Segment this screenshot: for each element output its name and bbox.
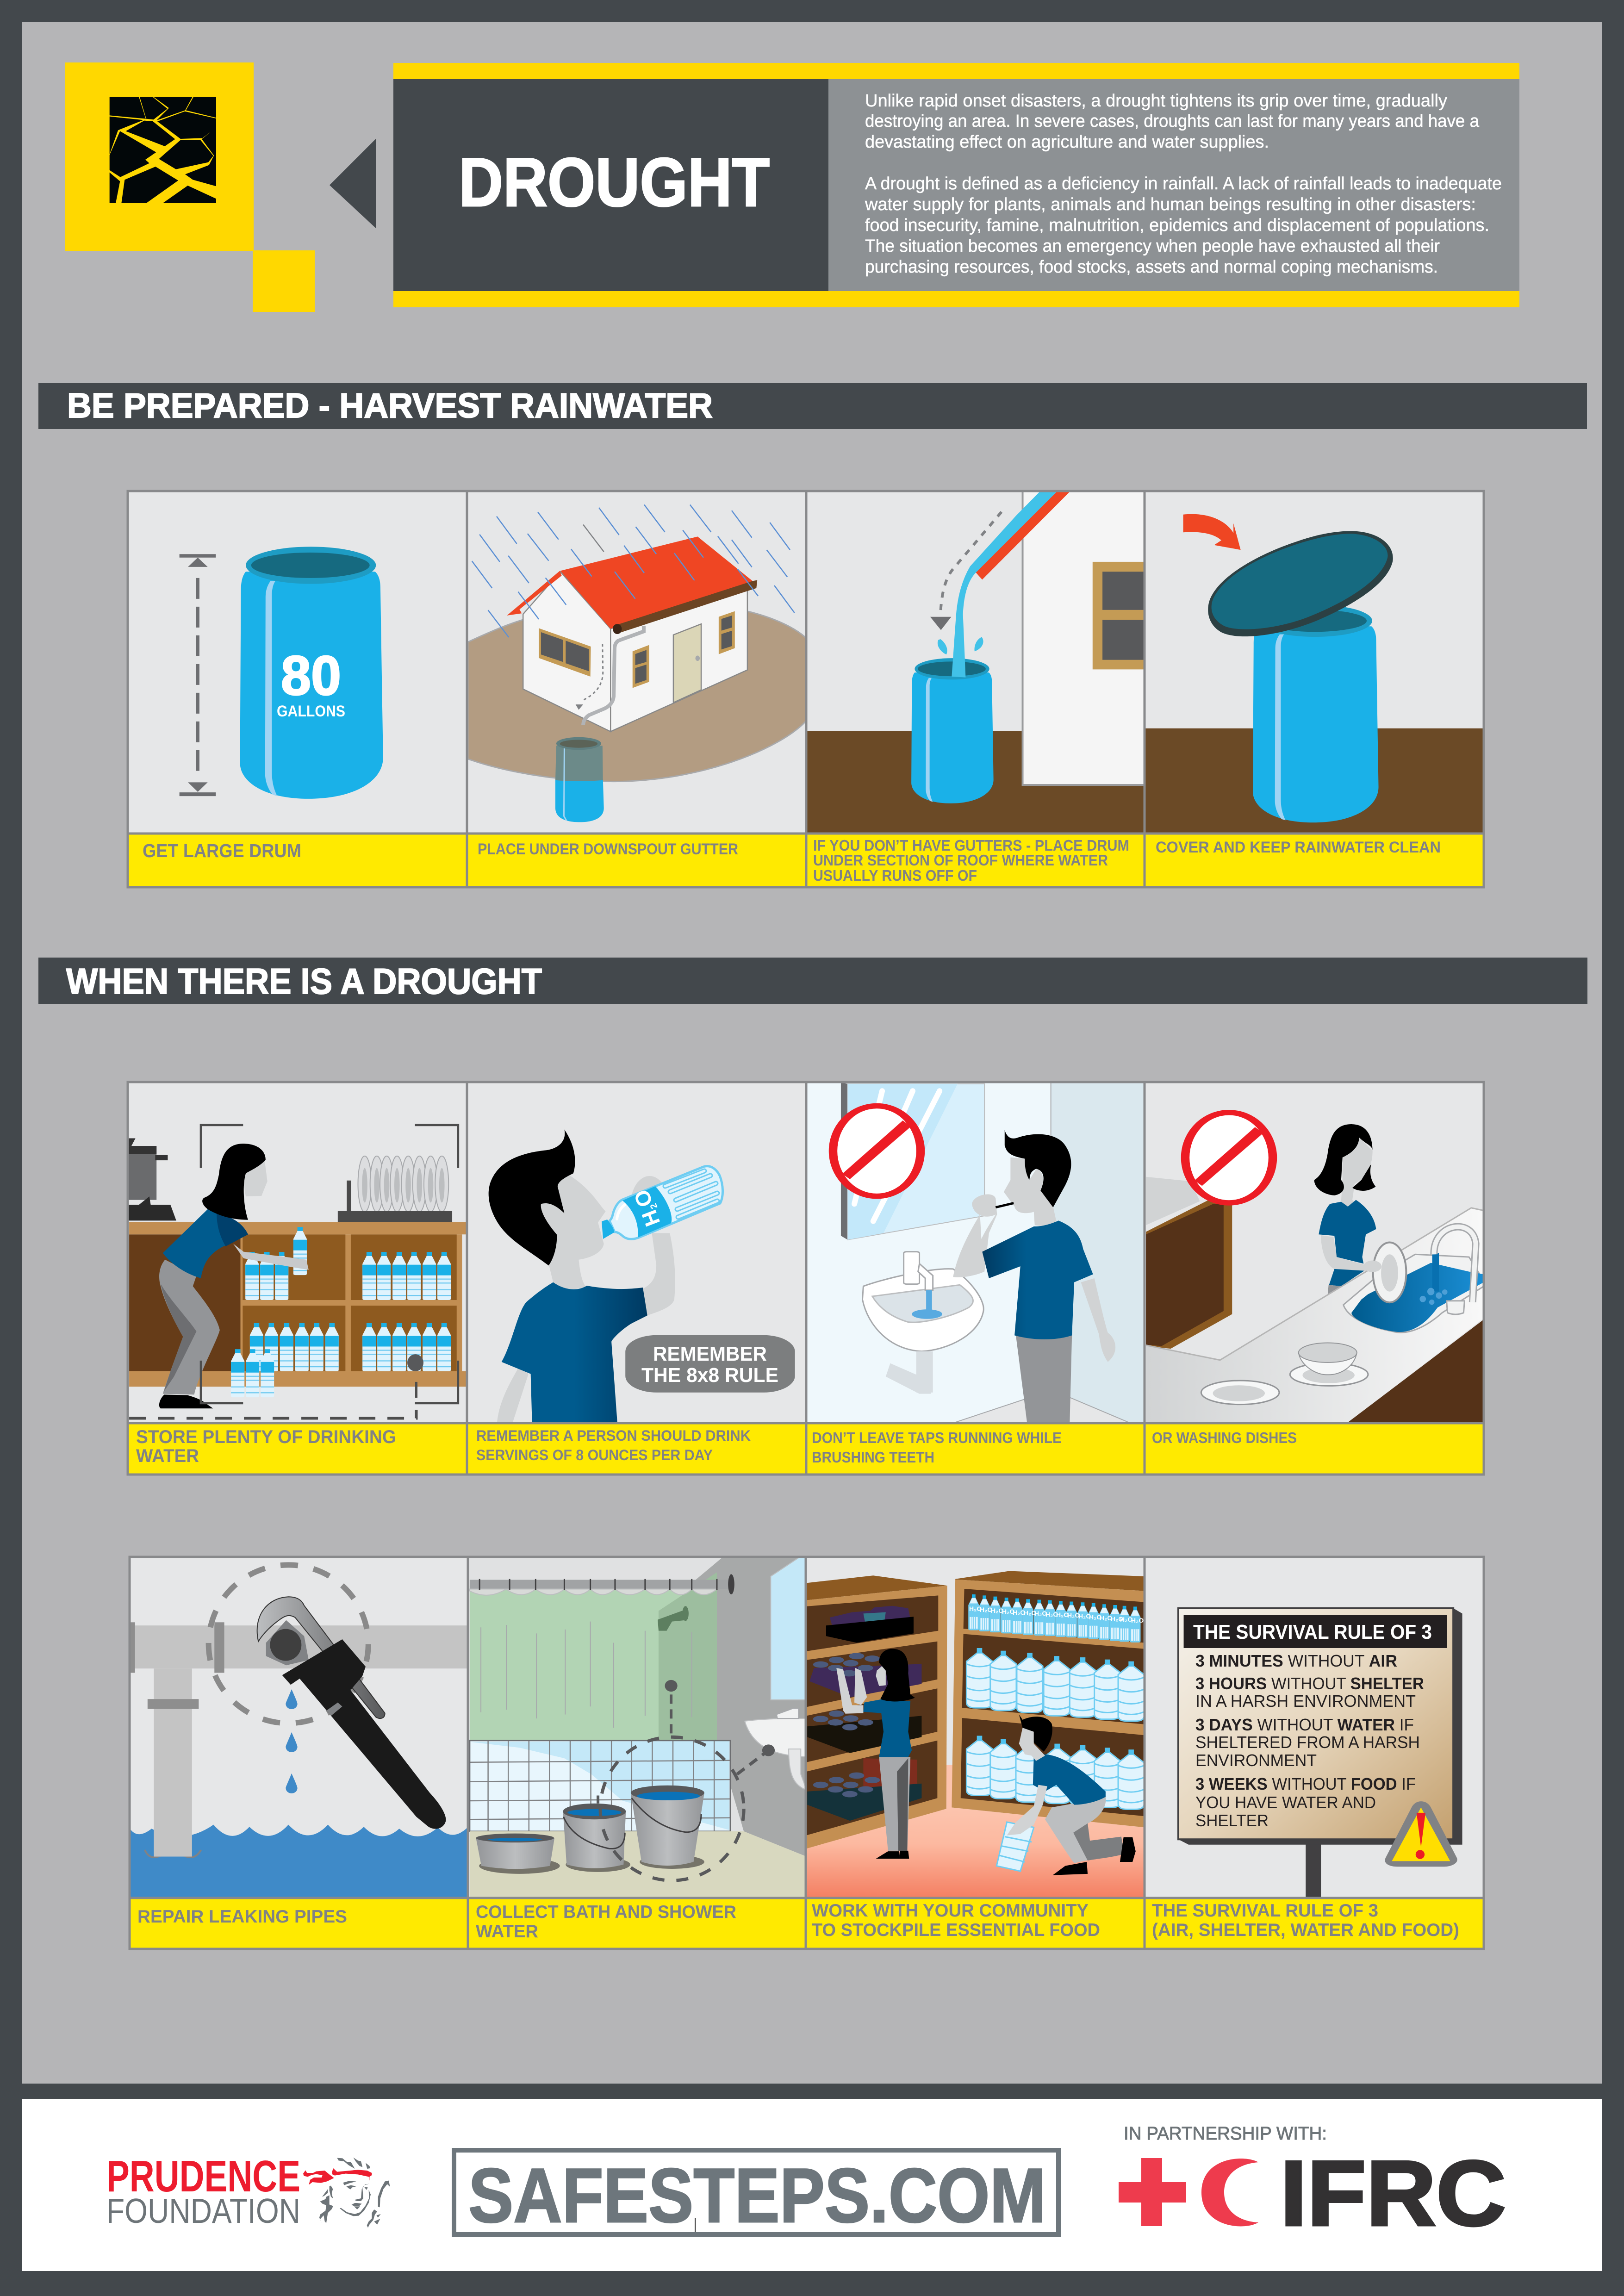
caption: REPAIR LEAKING PIPES [137, 1907, 347, 1927]
icon: H2O bottle: 2 [648, 1202, 660, 1210]
caption: (AIR, SHELTER, WATER AND FOOD) [1152, 1920, 1459, 1940]
logo: IFRC: IFRC [1280, 2142, 1506, 2245]
panel: community stockpile [806, 1557, 1145, 1949]
panel: store drinking water [128, 1082, 467, 1475]
sign text [1195, 1651, 1424, 1830]
sign text: YOU HAVE WATER AND [1195, 1793, 1376, 1812]
small bottle labels: H₂O [1034, 1610, 1047, 1617]
illustration: roof runoff into drum [806, 489, 1148, 834]
panel: collect bath water [468, 1557, 807, 1949]
caption: OR WASHING DISHES [1152, 1429, 1297, 1446]
panel: cover drum [1145, 491, 1484, 887]
panel: place under downspout [467, 491, 812, 887]
panel: do not leave taps running [806, 1082, 1145, 1475]
illustration: lid on drum [1145, 514, 1484, 834]
sign text: ENVIRONMENT [1195, 1751, 1317, 1770]
logo: IFRC [1119, 2142, 1506, 2245]
header panel [393, 63, 1519, 307]
caption: WATER [136, 1446, 199, 1466]
intro text [865, 91, 1502, 277]
small bottle labels: H₂O [1120, 1616, 1132, 1623]
sign text: IN A HARSH ENVIRONMENT [1195, 1692, 1416, 1711]
illustration: man drinking [489, 1130, 795, 1422]
partnership label: IN PARTNERSHIP WITH: [1124, 2123, 1327, 2144]
caption: REMEMBER A PERSON SHOULD DRINK [476, 1427, 751, 1444]
caption [806, 834, 1145, 887]
caption: USUALLY RUNS OFF OF [813, 867, 977, 884]
caption: PLACE UNDER DOWNSPOUT GUTTER [478, 840, 738, 858]
heading: be prepared: BE PREPARED - HARVEST RAINWATER [67, 386, 713, 425]
caption [128, 1423, 467, 1475]
small bottle labels: H₂O [980, 1606, 992, 1613]
small bottle labels: H₂O [1100, 1614, 1112, 1622]
small bottle labels: H₂O [991, 1607, 1003, 1614]
small bottle labels: H₂O [969, 1605, 982, 1612]
intro text: Unlike rapid onset disasters, a drought tightens its grip over time, gradually [865, 91, 1447, 111]
small bottle labels: H₂O [1067, 1612, 1080, 1619]
caption [806, 1898, 1145, 1949]
caption: SERVINGS OF 8 OUNCES PER DAY [476, 1447, 713, 1463]
small bottle labels: H₂O [1013, 1609, 1025, 1616]
icon: H2O bottle [602, 1166, 723, 1239]
caption [467, 834, 806, 887]
small bottle labels [969, 1605, 1144, 1624]
sign text: SHELTERED FROM A HARSH [1195, 1733, 1420, 1752]
caption: WATER [476, 1922, 538, 1941]
caption [1145, 1423, 1484, 1475]
intro text: purchasing resources, food stocks, assets and normal coping mechanisms. [865, 257, 1438, 277]
logo: prudence foundation [106, 2152, 390, 2230]
small bottle labels: H₂O [1131, 1617, 1144, 1624]
caption: TO STOCKPILE ESSENTIAL FOOD [812, 1920, 1100, 1940]
caption: WORK WITH YOUR COMMUNITY [812, 1901, 1089, 1921]
panel: repair leaking pipes [130, 1557, 468, 1949]
illustration: woman washing dishes [1146, 1110, 1484, 1423]
icon: 80 gallon drum with height arrow: 80 [281, 645, 341, 707]
icon: 80 gallon drum with height arrow [180, 547, 383, 799]
title: DROUGHT [459, 143, 770, 221]
intro text: water supply for plants, animals and human beings resulting in other disasters: [865, 195, 1476, 214]
caption: IF YOU DON’T HAVE GUTTERS - PLACE DRUM [813, 837, 1129, 854]
panel: 8x8 rule [467, 1082, 806, 1475]
small bottle labels: H₂O [1024, 1609, 1036, 1617]
intro text: The situation becomes an emergency when people have exhausted all their [865, 236, 1440, 256]
caption [1145, 1898, 1484, 1949]
sign text: 3 HOURS WITHOUT SHELTER [1195, 1674, 1424, 1693]
illustration: wrench on leaking pipe [131, 1565, 467, 1898]
caption: STORE PLENTY OF DRINKING [136, 1427, 396, 1447]
illustration: buckets in shower [470, 1557, 807, 1898]
icon: 80 gallon drum with height arrow: GALLONS [277, 703, 345, 720]
caption [128, 834, 467, 887]
logo: cracked earth drought icon [65, 62, 315, 312]
heading: when there is a drought: WHEN THERE IS A DROUGHT [66, 961, 542, 1002]
small bottle labels: H₂O [1045, 1611, 1058, 1618]
caption [806, 1423, 1145, 1475]
small bottle labels: H₂O [1002, 1608, 1014, 1615]
sign text: 3 WEEKS WITHOUT FOOD IF [1195, 1774, 1416, 1793]
caption [130, 1898, 468, 1949]
arrow pointing to logo [330, 139, 376, 228]
callout: 8x8 rule: THE 8x8 RULE [641, 1364, 778, 1387]
caption: GET LARGE DRUM [143, 840, 301, 861]
illustration: house in rain with downspout [468, 505, 812, 822]
caption [1145, 834, 1484, 887]
intro text: destroying an area. In severe cases, droughts can last for many years and have a [865, 112, 1480, 131]
intro text: food insecurity, famine, malnutrition, epidemics and displacement of populations. [865, 216, 1489, 235]
heading: be prepared [38, 383, 1587, 429]
intro text: devastating effect on agriculture and water supplies. [865, 132, 1269, 152]
intro text: A drought is defined as a deficiency in rainfall. A lack of rainfall leads to inadequate [865, 174, 1502, 193]
callout: 8x8 rule [641, 1343, 778, 1387]
illustration: man brushing teeth [829, 1083, 1145, 1423]
sign: survival rule of 3 [1178, 1608, 1462, 1897]
icon: warning triangle [1385, 1801, 1457, 1867]
caption: THE SURVIVAL RULE OF 3 [1152, 1901, 1378, 1921]
heading: when there is a drought [38, 958, 1587, 1004]
panel: get large drum [128, 491, 467, 887]
sign text: 3 MINUTES WITHOUT AIR [1195, 1651, 1397, 1670]
caption [468, 1898, 806, 1949]
callout: 8x8 rule: REMEMBER [653, 1343, 767, 1365]
small bottle labels: H₂O [1089, 1613, 1101, 1621]
sign text: SHELTER [1195, 1811, 1269, 1830]
caption: COLLECT BATH AND SHOWER [476, 1902, 736, 1922]
sign: survival rule of 3: THE SURVIVAL RULE OF 3 [1193, 1621, 1432, 1643]
caption: UNDER SECTION OF ROOF WHERE WATER [813, 852, 1108, 869]
panel: washing dishes [1145, 1082, 1484, 1475]
panel: survival rule of 3 [1145, 1557, 1484, 1949]
icon: H2O bottle: O [629, 1187, 657, 1211]
logo: safesteps.com: SAFESTEPS.COM [468, 2153, 1046, 2239]
panel: no gutters [806, 489, 1148, 887]
footer panel [22, 2099, 1602, 2271]
sign text: 3 DAYS WITHOUT WATER IF [1195, 1715, 1414, 1734]
caption: BRUSHING TEETH [812, 1449, 934, 1466]
logo: prudence foundation: PRUDENCE [106, 2152, 300, 2201]
small bottle labels: H₂O [1111, 1615, 1123, 1623]
caption: COVER AND KEEP RAINWATER CLEAN [1156, 839, 1441, 856]
logo: prudence foundation: FOUNDATION [106, 2191, 300, 2230]
illustration: people at shelves of water and food [806, 1571, 1145, 1898]
small bottle labels: H₂O [1078, 1612, 1091, 1620]
icon: H2O bottle: H [637, 1207, 665, 1230]
illustration: woman stocking bottles [128, 1125, 466, 1418]
small bottle labels: H₂O [1056, 1611, 1069, 1618]
caption [467, 1423, 806, 1475]
caption: DON’T LEAVE TAPS RUNNING WHILE [812, 1429, 1062, 1446]
